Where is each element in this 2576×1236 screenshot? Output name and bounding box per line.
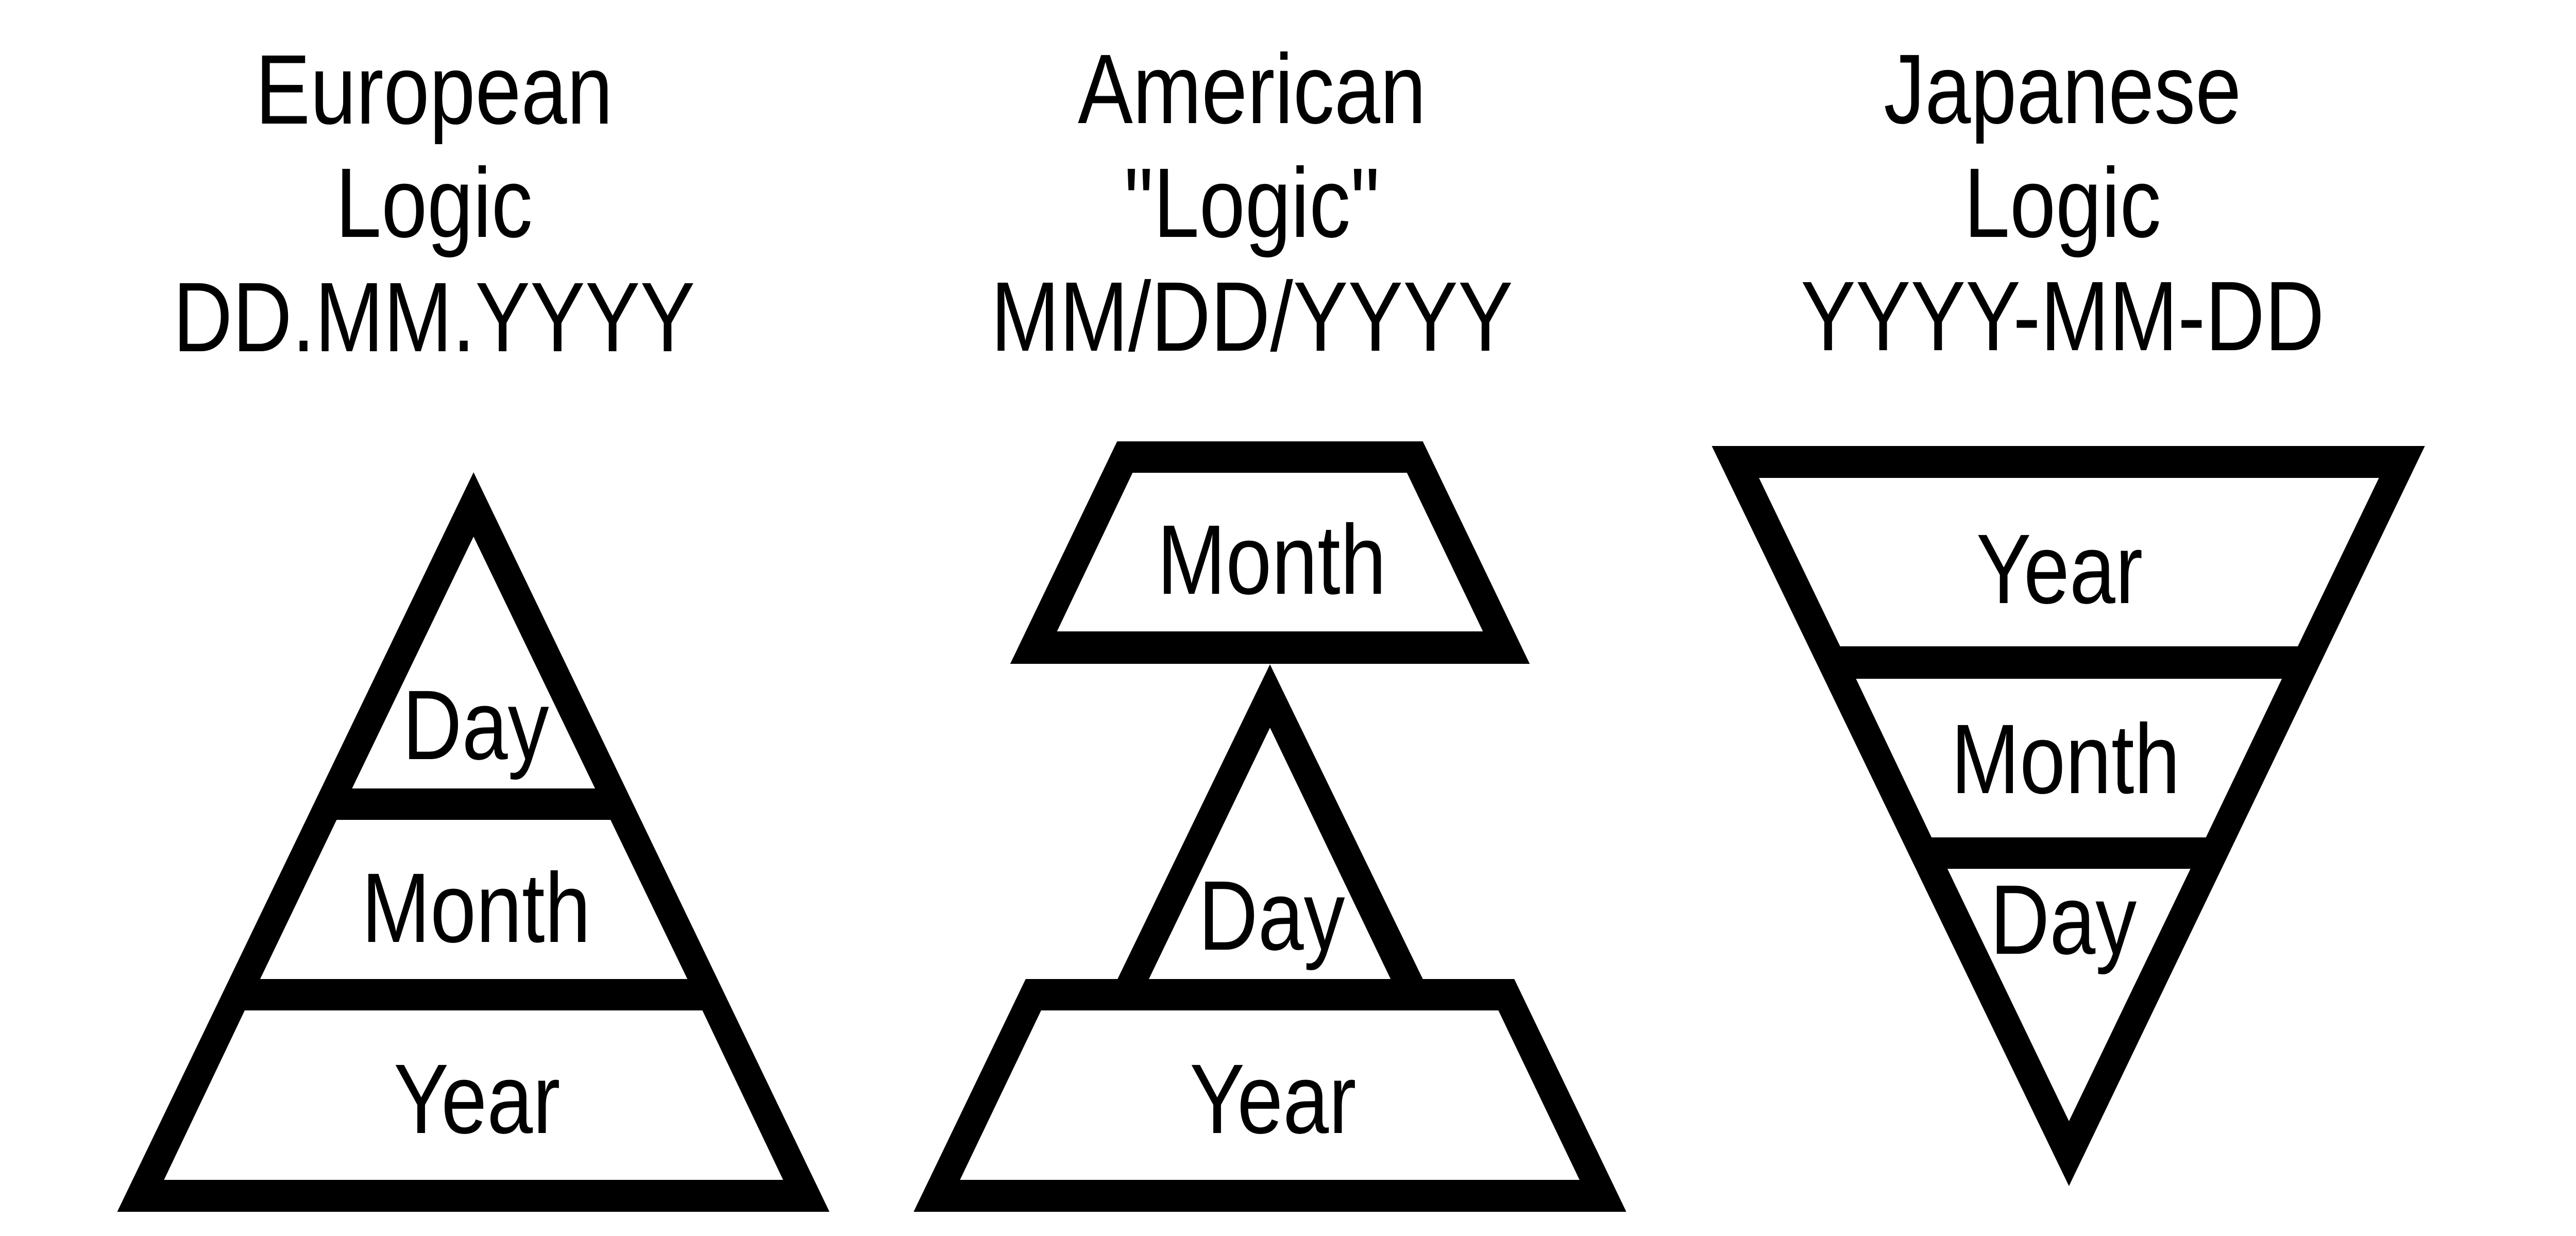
label: Year: Year: [394, 1044, 560, 1154]
shape: year trapezoid: [913, 979, 1626, 1212]
heading: European Logic DD.MM.YYYY: European: [256, 35, 613, 145]
heading: European Logic DD.MM.YYYY: Logic: [335, 148, 533, 258]
heading: European Logic DD.MM.YYYY: [173, 35, 695, 372]
shape: month trapezoid: [1010, 441, 1530, 664]
heading: Japanese Logic YYYY-MM-DD: [1801, 34, 2325, 371]
label: Day: Day: [1198, 861, 1345, 971]
label: Month: Month: [1951, 704, 2180, 814]
heading: Japanese Logic YYYY-MM-DD: YYYY-MM-DD: [1801, 261, 2325, 371]
heading: European Logic DD.MM.YYYY: DD.MM.YYYY: [173, 262, 695, 372]
heading: American "Logic" MM/DD/YYYY: MM/DD/YYYY: [991, 262, 1513, 372]
inverted pyramid: year on top, month, day at point: [1711, 446, 2425, 1186]
panel: American logic: [913, 34, 1626, 1212]
label: Month: Month: [362, 853, 591, 963]
heading: American "Logic" MM/DD/YYYY: American: [1078, 34, 1426, 144]
label: Year: Year: [1976, 514, 2143, 624]
heading: American "Logic" MM/DD/YYYY: "Logic": [1124, 148, 1380, 258]
heading: Japanese Logic YYYY-MM-DD: Japanese: [1884, 34, 2241, 144]
label: Year: Year: [1190, 1044, 1356, 1154]
panel: European logic: [117, 35, 829, 1212]
panel: Japanese logic: [1711, 34, 2425, 1186]
shape: day triangle: [1101, 664, 1438, 1010]
label: Month: Month: [1157, 505, 1386, 615]
label: Day: Day: [1990, 865, 2137, 975]
heading: Japanese Logic YYYY-MM-DD: Logic: [1964, 148, 2161, 258]
label: Day: Day: [402, 670, 549, 780]
pyramid: day on top, month, year at base: [117, 472, 829, 1212]
heading: American "Logic" MM/DD/YYYY: [991, 34, 1513, 372]
